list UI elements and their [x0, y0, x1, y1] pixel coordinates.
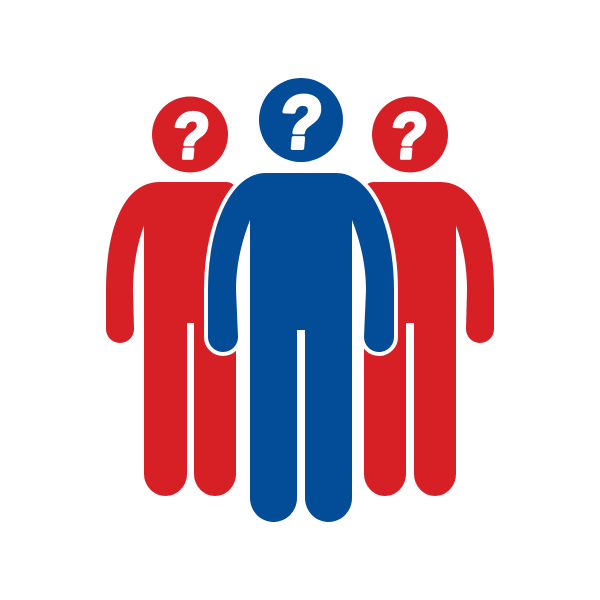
center figure head: [259, 78, 343, 162]
right figure head: [372, 96, 448, 172]
right figure question mark: ?: [387, 100, 430, 173]
left figure question mark: ?: [169, 100, 212, 173]
center figure body: [208, 173, 394, 522]
right figure body: [364, 182, 494, 496]
figure: left red person: [106, 96, 236, 496]
center figure question mark: ?: [276, 82, 326, 165]
left figure body: [106, 182, 236, 496]
left figure head: [152, 96, 228, 172]
figure: center blue person: [208, 78, 394, 522]
figure: right red person: [364, 96, 494, 496]
